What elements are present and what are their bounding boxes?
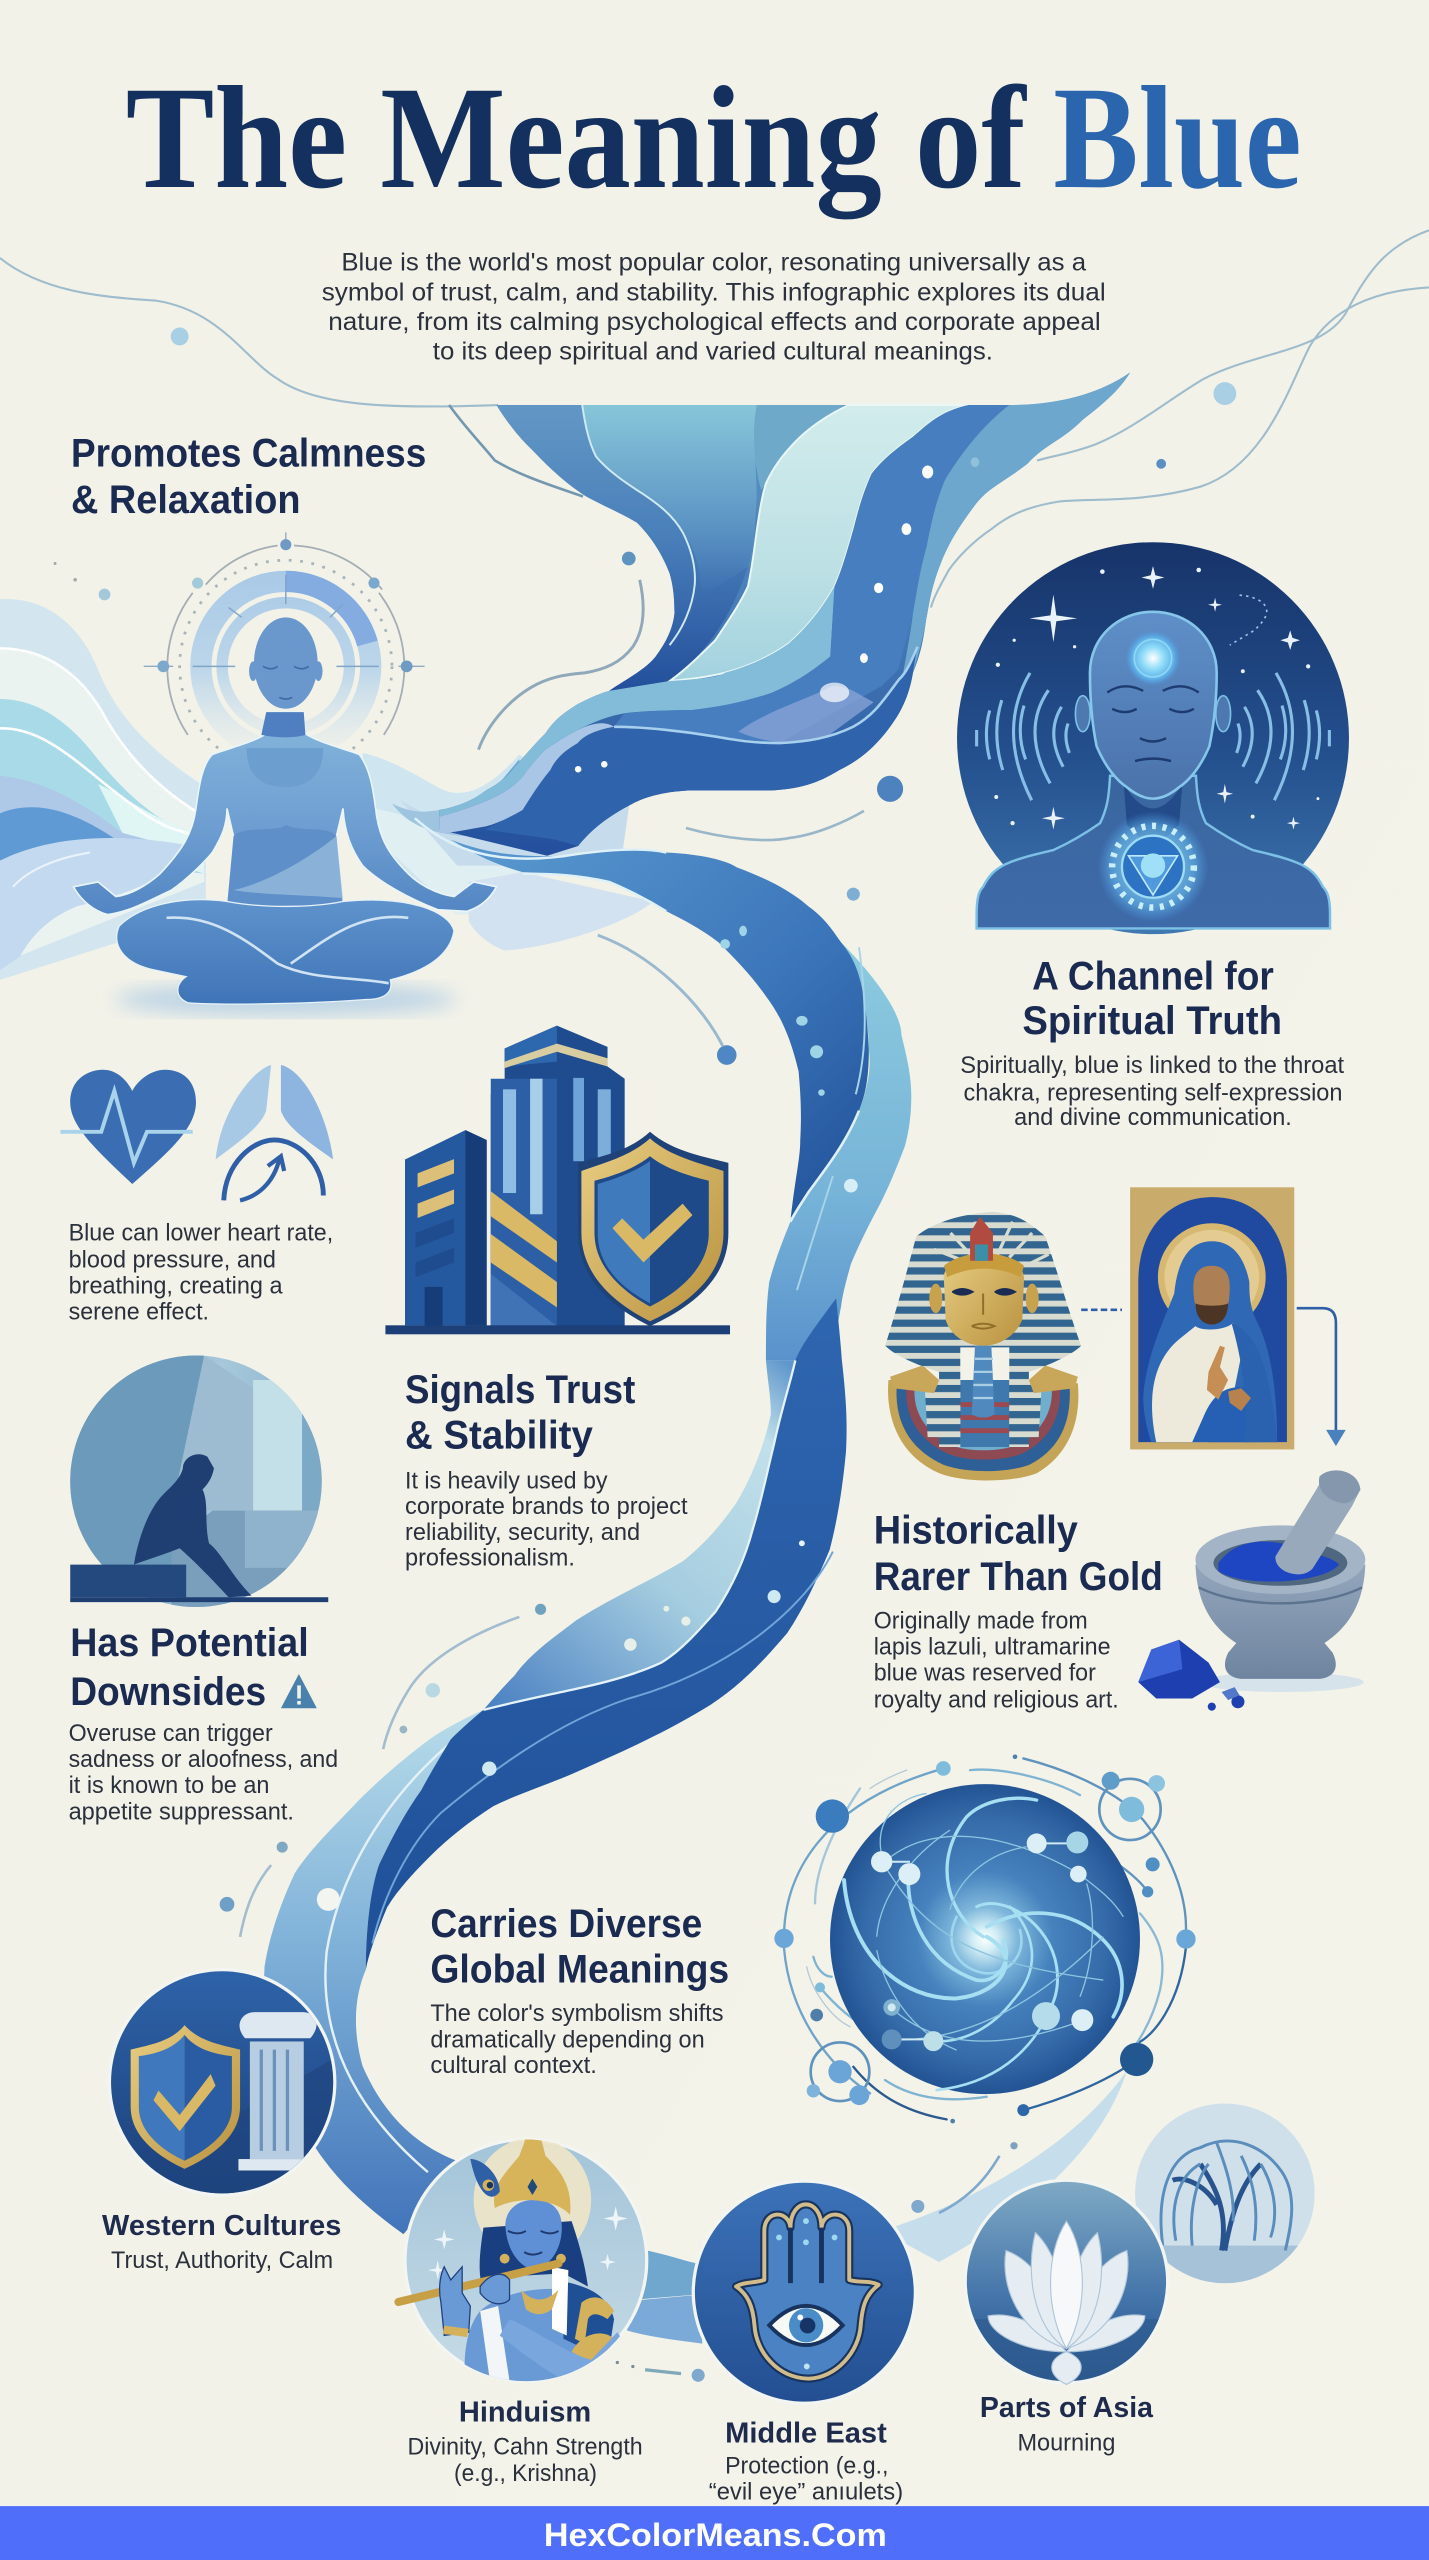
text: ultramarine description: royalty and religious art.: [874, 1687, 1119, 1713]
text: trust description: professionalism.: [405, 1545, 575, 1571]
icon: mortar and pestle with lapis: [1138, 1470, 1365, 1711]
icon: corporate building with shield: [385, 1026, 730, 1334]
icon: pharaoh mask: [885, 1212, 1081, 1480]
panel: spiritual figure circle: [957, 542, 1349, 934]
intro text: symbol of trust, calm, and stability. This infographic explores its dual: [322, 279, 1106, 307]
heading: promotes calmness: & Relaxation: [71, 478, 300, 522]
icon: global swirl with orbits: [774, 1754, 1196, 2149]
heading: signals trust: [405, 1368, 635, 1458]
text: symbolism description: dramatically depending on: [430, 2027, 705, 2053]
text: ultramarine description: blue was reserved for: [874, 1661, 1096, 1687]
text: ultramarine description: lapis lazuli, ultramarine: [874, 1634, 1111, 1660]
intro text: to its deep spiritual and varied cultural meanings.: [433, 337, 993, 365]
heading: historically rarer than gold: Historically: [874, 1508, 1079, 1552]
text: symbolism description: cultural context.: [430, 2053, 597, 2079]
text: downsides description: [69, 1721, 338, 1825]
soft waves behind figure: [0, 599, 653, 980]
label: parts of asia: [980, 2392, 1154, 2457]
text: downsides description: Overuse can trigger: [69, 1721, 273, 1747]
text: downsides description: it is known to be an: [69, 1773, 269, 1799]
footer band: HexColorMeans.Com: [544, 2516, 887, 2553]
text: symbolism description: The color's symbolism shifts: [430, 2001, 723, 2027]
label: hinduism: Hinduism: [459, 2397, 591, 2429]
icon: krishna with flute: [398, 2130, 648, 2393]
top flowing ribbon: [439, 372, 1130, 856]
heading: signals trust: & Stability: [405, 1414, 594, 1458]
label: middle east: “evil eye” anıulets): [709, 2480, 903, 2506]
text: ultramarine description: Originally made from: [874, 1608, 1088, 1634]
heading: diverse global meanings: Global Meanings: [430, 1948, 729, 1992]
icon: western cultures shield and column: [108, 1968, 336, 2197]
label: middle east: Protection (e.g.,: [725, 2454, 888, 2480]
icon: hamsa hand with evil eye: [692, 2179, 917, 2405]
text: heart rate description: [69, 1220, 333, 1326]
text: heart rate description: serene effect.: [69, 1300, 209, 1326]
text: trust description: It is heavily used by: [405, 1469, 608, 1495]
text: ultramarine description: [874, 1608, 1119, 1713]
text: trust description: [405, 1469, 688, 1571]
footer band: [0, 2506, 1429, 2560]
label: hinduism: [407, 2397, 643, 2487]
text: heart rate description: breathing, creating a: [69, 1273, 283, 1299]
label: parts of asia: Mourning: [1017, 2431, 1115, 2457]
heading: historically rarer than gold: Rarer Than Gold: [874, 1555, 1163, 1599]
intro text: Blue is the world's most popular color, resonating universally as a: [341, 248, 1087, 276]
heading: promotes calmness: Promotes Calmness: [71, 431, 426, 475]
text: downsides description: sadness or aloofness, and: [69, 1747, 338, 1773]
label: hinduism: Divinity, Cahn Strength: [407, 2435, 643, 2461]
label: western cultures: [102, 2210, 341, 2274]
text: spiritual truth description: [960, 1053, 1344, 1131]
heading: historically rarer than gold: [874, 1508, 1163, 1599]
label: parts of asia: Parts of Asia: [980, 2392, 1154, 2424]
icon: sad figure in room circle: [70, 1356, 328, 1609]
text: trust description: reliability, security, and: [405, 1520, 640, 1546]
text: spiritual truth description: chakra, representing self-expression: [964, 1081, 1342, 1107]
title: The Meaning of: [126, 56, 1027, 219]
label: western cultures: Trust, Authority, Calm: [111, 2248, 333, 2274]
heading: potential downsides with warning icon: Downsides: [70, 1670, 266, 1714]
heading: potential downsides with warning icon: [70, 1621, 317, 1714]
icon: willow tree: [1135, 2104, 1315, 2295]
heading: channel for spiritual truth: Spiritual Truth: [1022, 999, 1282, 1043]
icon: heart with pulse: [60, 1070, 196, 1184]
decorative flowing lines: [0, 230, 1429, 840]
icon: religious icon painting: [1130, 1187, 1294, 1449]
heading: potential downsides with warning icon: Has Potential: [70, 1621, 309, 1665]
icon: lotus flower: [964, 2179, 1176, 2384]
heading: channel for spiritual truth: [1022, 955, 1282, 1043]
text: heart rate description: blood pressure, and: [69, 1247, 276, 1273]
text: heart rate description: Blue can lower heart rate,: [69, 1220, 333, 1246]
main S-shaped ribbon: [264, 818, 1127, 2344]
intro text: [322, 248, 1106, 365]
label: middle east: [709, 2417, 903, 2506]
text: trust description: corporate brands to project: [405, 1494, 688, 1520]
label: middle east: Middle East: [725, 2417, 887, 2449]
heading: signals trust: Signals Trust: [405, 1368, 635, 1412]
icon: lungs: [216, 1065, 333, 1200]
heading: diverse global meanings: [430, 1902, 729, 1992]
text: spiritual truth description: Spiritually, blue is linked to the throat: [960, 1053, 1344, 1079]
connector: dashed line: [1081, 1309, 1122, 1311]
text: symbolism description: [430, 2001, 723, 2079]
title: Blue: [1053, 56, 1302, 219]
intro text: nature, from its calming psychological effects and corporate appeal: [328, 308, 1101, 336]
heading: channel for spiritual truth: A Channel for: [1032, 955, 1274, 999]
heading: promotes calmness: [71, 431, 426, 522]
arrow: icon to mortar: [1297, 1308, 1346, 1446]
label: hinduism: (e.g., Krishna): [454, 2461, 597, 2487]
text: downsides description: appetite suppressant.: [69, 1799, 294, 1825]
decorative dots and thin arcs: [54, 327, 1236, 2382]
icon: meditating figure with halo: [73, 532, 496, 1016]
heading: diverse global meanings: Carries Diverse: [430, 1902, 702, 1946]
label: western cultures: Western Cultures: [102, 2210, 341, 2242]
text: spiritual truth description: and divine communication.: [1014, 1105, 1292, 1131]
